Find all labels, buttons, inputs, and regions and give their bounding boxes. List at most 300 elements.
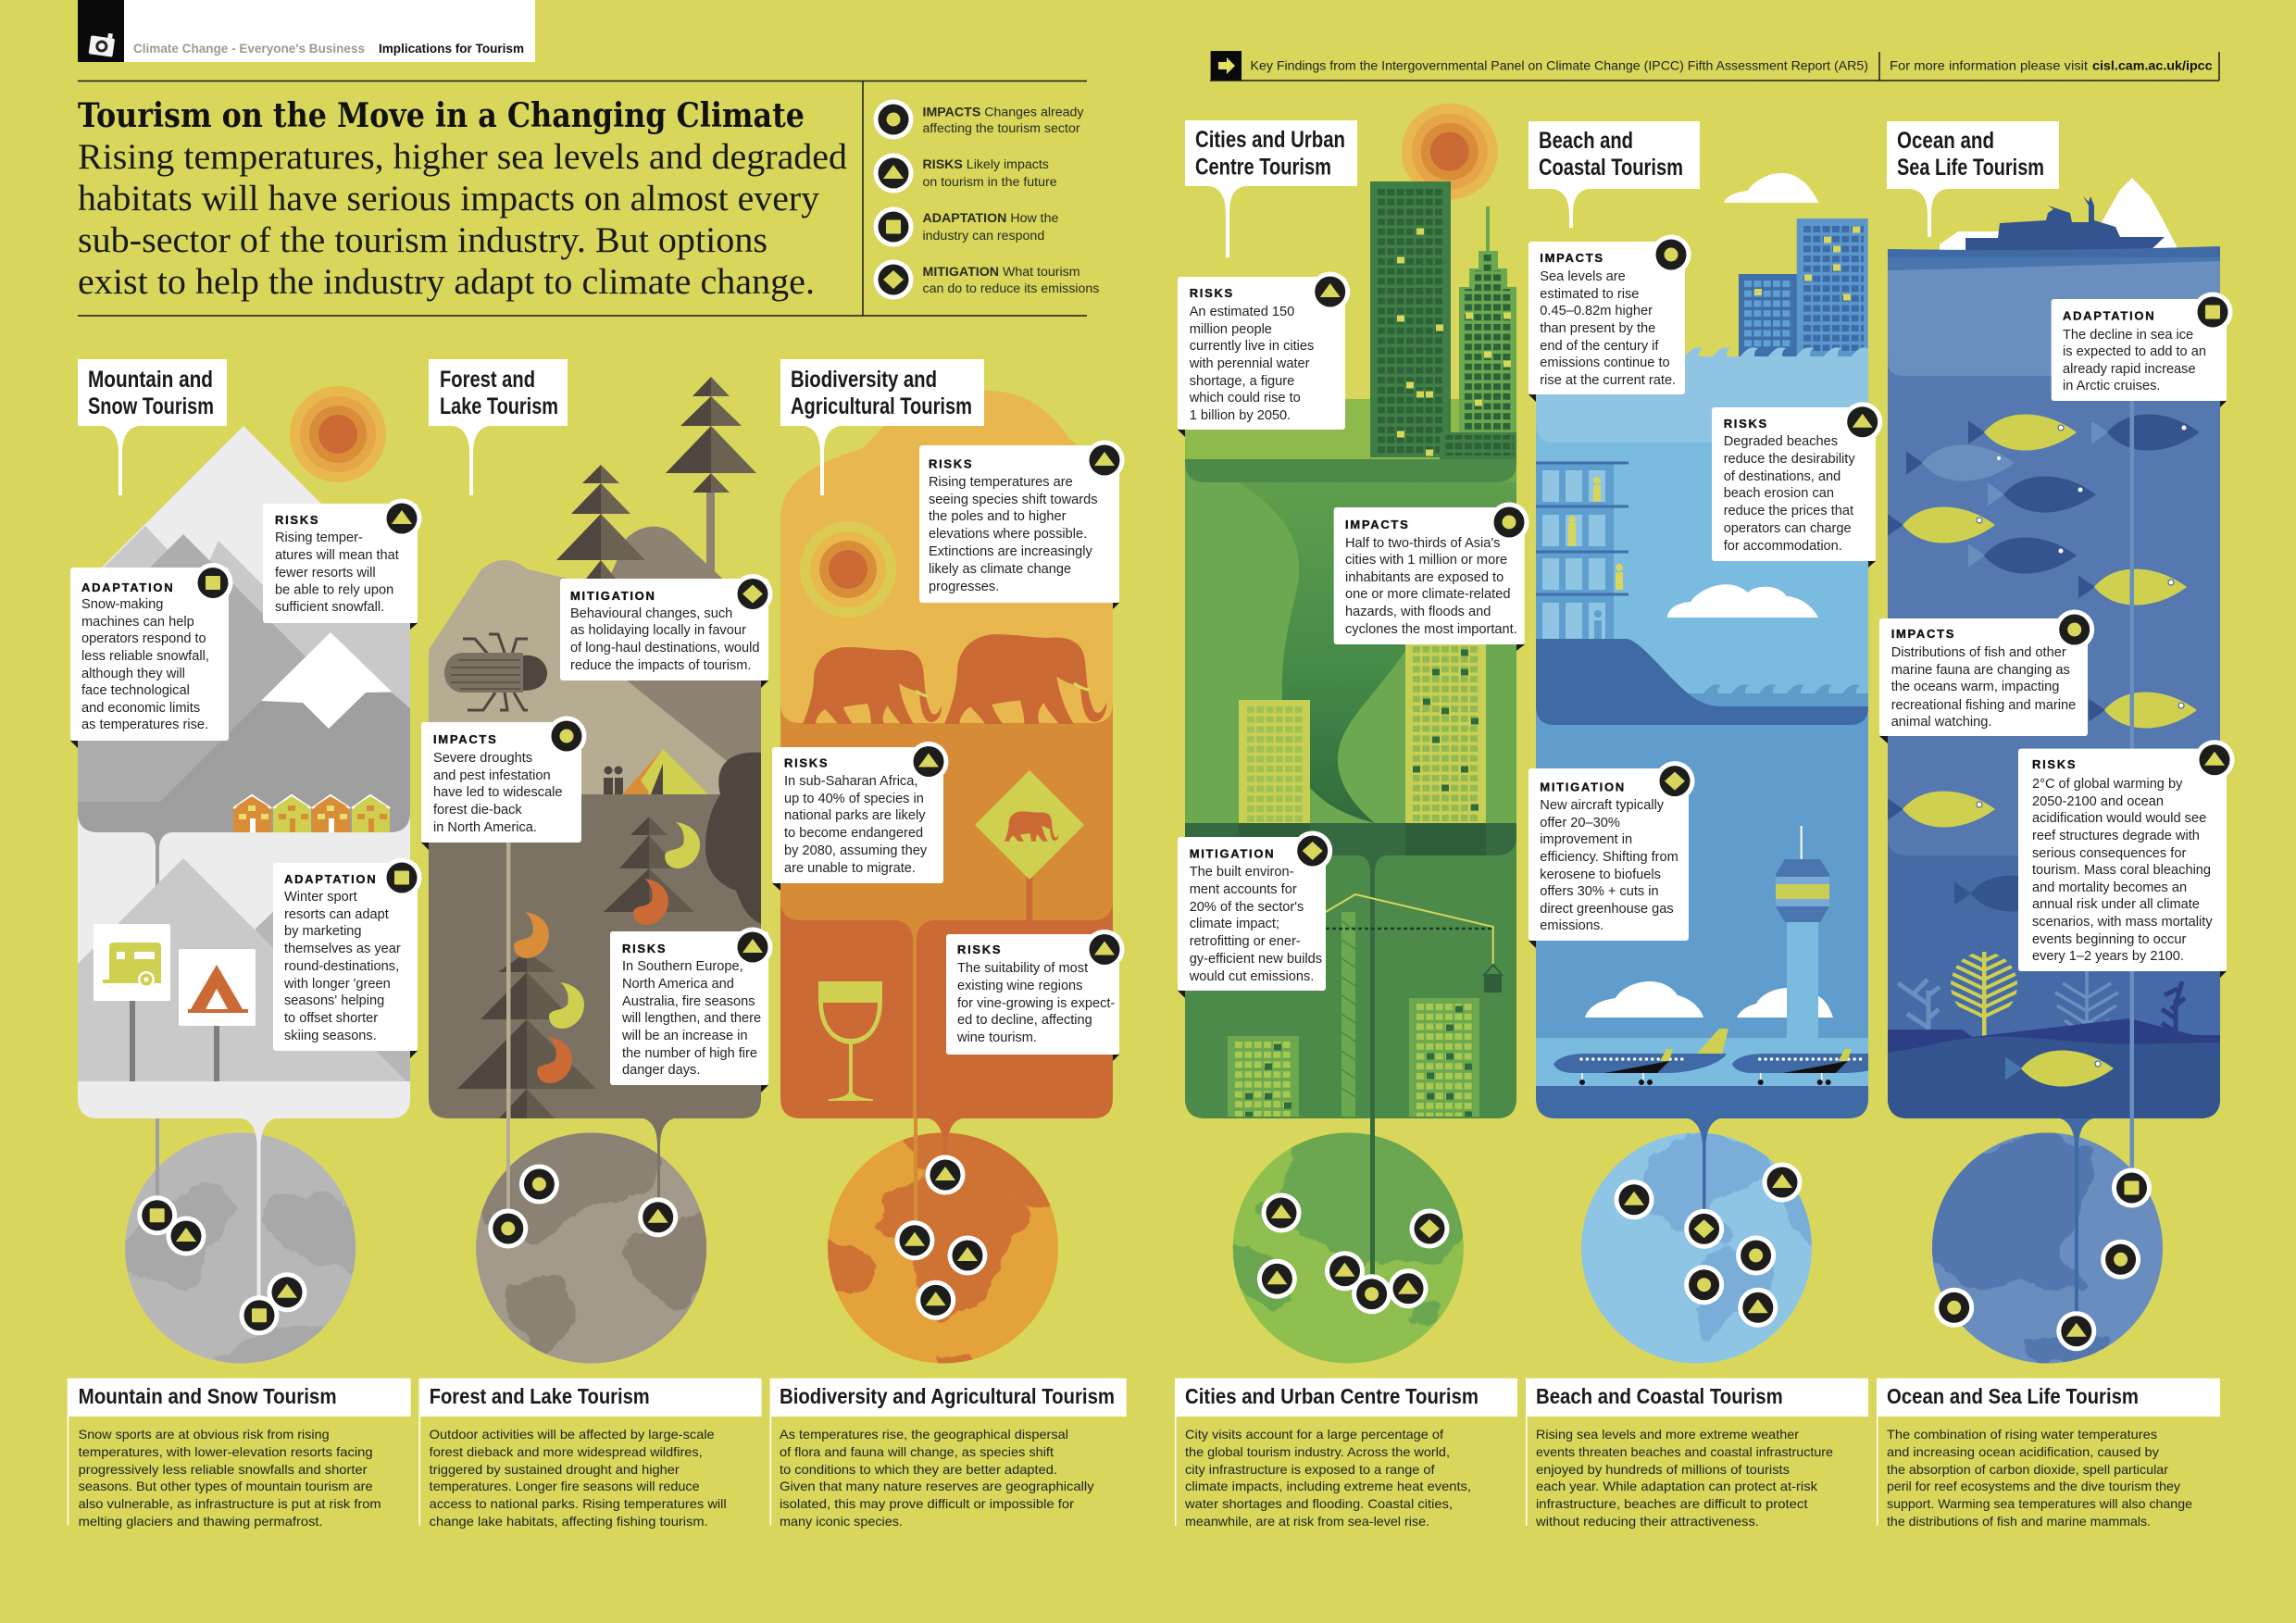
callout: mountain adaptation, green seasons: resorts can adapt: [284, 907, 389, 922]
callout: ocean risks: acidification would would see: [2032, 811, 2206, 826]
key findings header: [1210, 51, 2219, 81]
callout: cities mitigation: climate impact;: [1190, 917, 1279, 931]
summary: Cities and Urban Centre Tourism: City visits account for a large percentage of: [1185, 1427, 1443, 1442]
column title: Beach and Coastal Tourism: Coastal Tourism: [1539, 155, 1683, 181]
clouds: airport: [1585, 981, 1833, 1017]
column title: Ocean and Sea Life Tourism: Sea Life Tourism: [1897, 155, 2044, 181]
callout: ocean risks: [2018, 740, 2235, 978]
callout: mountain risks: fewer resorts will: [275, 566, 376, 581]
callout: cities risks: which could rise to: [1189, 391, 1301, 406]
callout: forest impacts: in North America.: [433, 820, 537, 835]
key findings header: cisl.cam.ac.uk/ipcc: [2092, 58, 2213, 73]
key findings header: For more information please visit: [1890, 58, 2088, 73]
stems to globes: [156, 1118, 2134, 1329]
summary: Beach and Coastal Tourism: infrastructure, beaches are difficult to protect: [1536, 1496, 1808, 1511]
ground lower: [1185, 823, 1516, 1118]
tree: upper left: [556, 465, 645, 583]
sign: elephant crossing: [977, 772, 1082, 920]
callout: beach risks: reduce the prices that: [1724, 504, 1853, 518]
summary: Ocean and Sea Life Tourism: the distributions of fish and marine mammals.: [1887, 1514, 2151, 1529]
callout: forest impacts: [421, 717, 587, 850]
legend: affecting the tourism sector: [922, 121, 1080, 136]
tower: tall: [1370, 181, 1516, 459]
callout: biodiversity risks, Africa: up to 40% of species in: [784, 792, 924, 806]
callout: beach mitigation: efficiency. Shifting from: [1540, 850, 1678, 865]
callout: ocean adaptation: ADAPTATION: [2063, 309, 2155, 323]
legend: [874, 100, 1099, 300]
callout: biodiversity risks, species shift: elevations where possible.: [929, 527, 1087, 542]
callout: biodiversity risks, wine: for vine-growing is expect-: [957, 996, 1115, 1011]
callout: mountain risks: atures will mean that: [275, 548, 399, 563]
summary: Cities and Urban Centre Tourism: city infrastructure is exposed to a range of: [1185, 1462, 1435, 1477]
summary: Ocean and Sea Life Tourism: support. Warming sea temperatures will also change: [1887, 1496, 2192, 1511]
seabed: [1888, 1018, 2220, 1118]
callout: beach impacts: estimated to rise: [1540, 287, 1639, 302]
callout: forest impacts: Severe droughts: [433, 751, 532, 766]
callout: cities impacts: IMPACTS: [1345, 518, 1409, 531]
callout: mountain adaptation, snow-making: [70, 563, 233, 748]
callout: biodiversity risks, species shift: Extinctions are increasingly: [929, 544, 1093, 559]
column title: Mountain and Snow Tourism: [78, 359, 227, 495]
callout: mountain adaptation, green seasons: Winter sport: [284, 890, 357, 905]
summary: Cities and Urban Centre Tourism: the global tourism industry. Across the world,: [1185, 1444, 1450, 1459]
column title: Mountain and Snow Tourism: Mountain and: [88, 367, 213, 393]
towers: seafront: [1739, 218, 1868, 356]
fish: bottom: [2005, 1050, 2114, 1087]
building: lower right: [1409, 998, 1479, 1117]
intro text: habitats will have serious impacts on almost every: [78, 179, 819, 218]
summary: Mountain and Snow Tourism: Mountain and Snow Tourism: [79, 1384, 337, 1408]
callout: ocean adaptation: [2052, 293, 2233, 407]
column title: Forest and Lake Tourism: [429, 359, 568, 495]
callout: ocean risks: tourism. Mass coral bleaching: [2032, 863, 2211, 878]
key findings header: Key Findings from the Intergovernmental Panel on Climate Change (IPCC) Fifth Assessment Report (AR5): [1250, 58, 1868, 73]
fish shoal: [1887, 414, 2200, 912]
callout: mountain adaptation, green seasons: [273, 857, 422, 1058]
callout: cities mitigation: 20% of the sector's: [1190, 900, 1304, 915]
icon: camera: [89, 31, 116, 57]
callout: cities impacts: cities with 1 million or more: [1345, 553, 1507, 568]
summary: Forest and Lake Tourism: [418, 1379, 761, 1529]
callout: cities mitigation: retrofitting or ener-: [1190, 934, 1301, 949]
callout: forest mitigation: MITIGATION: [570, 589, 656, 603]
legend: IMPACTS Changes already: [922, 106, 1084, 120]
callout: forest risks: the number of high fire: [622, 1046, 757, 1061]
callout: forest risks: will be an increase in: [621, 1029, 747, 1043]
globe: forest: [476, 1133, 707, 1363]
callout: cities mitigation: The built environ-: [1190, 865, 1294, 880]
callout: biodiversity risks, species shift: [919, 441, 1124, 609]
coral: left branch: [1898, 980, 1940, 1046]
callout: forest risks: North America and: [622, 977, 734, 992]
callout: beach impacts: than present by the: [1540, 321, 1655, 336]
column title: Mountain and Snow Tourism: Snow Tourism: [88, 393, 214, 419]
elephants: [803, 634, 1106, 724]
summary: Mountain and Snow Tourism: seasons. But other types of mountain tourism are: [79, 1479, 373, 1493]
callout: biodiversity risks, Africa: national parks are likely: [784, 808, 926, 823]
callout: mountain adaptation, snow-making: machines can help: [81, 615, 194, 630]
callout: mountain adaptation, green seasons: skiing seasons.: [284, 1029, 377, 1043]
callout: forest impacts: IMPACTS: [433, 732, 497, 746]
callout: mountain adaptation, green seasons: to offset shorter: [284, 1011, 378, 1026]
intro text: Rising temperatures, higher sea levels and degraded: [78, 137, 848, 177]
summary: Forest and Lake Tourism: triggered by sustained drought and higher: [430, 1462, 680, 1477]
callout: biodiversity risks, species shift: Rising temperatures are: [929, 475, 1073, 490]
ship: [1965, 196, 2165, 253]
callout: mountain risks: be able to rely upon: [275, 583, 393, 598]
sun: [800, 521, 896, 618]
callout: mountain adaptation, green seasons: with longer 'green: [283, 977, 391, 992]
callout: mountain risks: [263, 498, 422, 630]
callout: biodiversity risks, Africa: are unable to migrate.: [784, 861, 916, 876]
globe markers: [137, 1155, 2152, 1351]
callout: beach mitigation: offer 20–30%: [1540, 816, 1620, 830]
sun: [1402, 104, 1498, 200]
summary: Biodiversity and Agricultural Tourism: of flora and fauna will change, as species shift: [780, 1444, 1054, 1459]
globe: beach: [1581, 1130, 1824, 1363]
callout: biodiversity risks, species shift: the poles and to higher: [929, 509, 1067, 524]
callout: forest impacts: have led to widescale: [433, 785, 563, 800]
callout: biodiversity risks, wine: [946, 930, 1124, 1061]
column title: Biodiversity and Agricultural Tourism: Agricultural Tourism: [791, 393, 972, 419]
callout: ocean impacts: marine fauna are changing as: [1891, 663, 2070, 678]
callout: ocean risks: annual risk under all climate: [2032, 897, 2200, 912]
header tab: [78, 0, 535, 62]
callout: ocean risks: every 1–2 years by 2100.: [2032, 949, 2184, 964]
summary: Cities and Urban Centre Tourism: climate impacts, including extreme heat events,: [1185, 1479, 1471, 1493]
iceberg: [1940, 178, 2178, 250]
callout: ocean impacts: recreational fishing and marine: [1891, 698, 2076, 713]
callout: mountain risks: sufficient snowfall.: [275, 600, 384, 615]
callout: mountain risks: RISKS: [275, 513, 319, 527]
callout: ocean adaptation: in Arctic cruises.: [2063, 379, 2160, 393]
legend: can do to reduce its emissions: [922, 281, 1099, 296]
callout: beach risks: for accommodation.: [1724, 539, 1842, 554]
callout: forest mitigation: reduce the impacts of tourism.: [570, 658, 751, 673]
summary: Forest and Lake Tourism: change lake habitats, affecting fishing tourism.: [430, 1514, 708, 1529]
intro text: exist to help the industry adapt to climate change.: [78, 262, 815, 302]
callout: beach impacts: 0.45–0.82m higher: [1540, 304, 1653, 318]
callout: biodiversity risks, Africa: to become endangered: [784, 826, 923, 841]
waves: top: [1685, 347, 1868, 356]
summary: Biodiversity and Agricultural Tourism: [770, 1379, 1127, 1529]
connector stem: [144, 832, 171, 889]
summary: Beach and Coastal Tourism: each year. While adaptation can protect at-risk: [1536, 1479, 1818, 1493]
bush: [705, 753, 761, 924]
callout: ocean risks: RISKS: [2032, 757, 2077, 771]
callout: cities risks: 1 billion by 2050.: [1190, 408, 1291, 423]
column title: Biodiversity and Agricultural Tourism: [780, 359, 984, 495]
callout: mountain adaptation, snow-making: and economic limits: [81, 701, 200, 716]
callout: beach mitigation: New aircraft typically: [1540, 798, 1665, 813]
coral: yellow fan: [1951, 952, 2017, 1036]
tower: stepped skyscraper: [1459, 206, 1516, 432]
globe: mountain: [120, 1133, 366, 1370]
sign: tent: [179, 949, 256, 1081]
callout: biodiversity risks, species shift: likely as climate change: [929, 562, 1071, 577]
plane 2: [1731, 1049, 1868, 1085]
callout: ocean risks: reef structures degrade with: [2032, 829, 2200, 843]
callout: forest mitigation: as holidaying locally in favour: [570, 623, 746, 638]
callout: mountain adaptation, snow-making: as temperatures rise.: [81, 718, 208, 732]
column title: Ocean and Sea Life Tourism: [1887, 121, 2059, 237]
callout: biodiversity risks, species shift: seeing species shift towards: [929, 493, 1098, 507]
callout: forest impacts: and pest infestation: [433, 768, 551, 783]
summary: Cities and Urban Centre Tourism: Cities and Urban Centre Tourism: [1185, 1384, 1479, 1408]
column title: Beach and Coastal Tourism: Beach and: [1539, 128, 1633, 154]
callout: ocean adaptation: is expected to add to an: [2063, 344, 2206, 359]
summary: Ocean and Sea Life Tourism: the absorption of carbon dioxide, spell particular: [1887, 1462, 2168, 1477]
panel: beach and coastal: [1536, 173, 1905, 1118]
summary: Beach and Coastal Tourism: events threaten beaches and coastal infrastructure: [1536, 1444, 1833, 1459]
callout: beach risks: operators can charge: [1724, 521, 1852, 536]
column title: Forest and Lake Tourism: Forest and: [440, 367, 535, 393]
callout: cities mitigation: gy-efficient new builds: [1190, 952, 1322, 967]
callout: ocean risks: and mortality becomes an: [2032, 880, 2187, 895]
callout: forest mitigation: [560, 574, 772, 688]
callout: ocean adaptation: already rapid increase: [2063, 362, 2196, 377]
callout: cities impacts: [1334, 502, 1529, 651]
stem: [1359, 855, 1386, 1118]
summary: Cities and Urban Centre Tourism: [1175, 1379, 1517, 1529]
summary: Biodiversity and Agricultural Tourism: isolated, this may prove difficult or impossible for: [780, 1496, 1074, 1511]
callout: biodiversity risks, Africa: In sub-Saharan Africa,: [784, 774, 917, 789]
column title: Biodiversity and Agricultural Tourism: Biodiversity and: [791, 367, 937, 393]
summary: Mountain and Snow Tourism: also vulnerable, as infrastructure is put at risk from: [79, 1496, 381, 1511]
callout: cities risks: shortage, a figure: [1190, 374, 1294, 389]
snow cap: [261, 632, 392, 729]
summary: Biodiversity and Agricultural Tourism: As temperatures rise, the geographical dispersal: [780, 1427, 1068, 1442]
building: mid right: [1405, 644, 1486, 823]
summary: Cities and Urban Centre Tourism: water shortages and flooding. Coastal cities,: [1184, 1496, 1453, 1511]
cloud: middle: [1667, 584, 1818, 618]
header tab: Implications for Tourism: [379, 42, 524, 56]
callout: beach risks: Degraded beaches: [1724, 434, 1838, 449]
callout: beach impacts: [1529, 235, 1691, 402]
callout: mountain adaptation, snow-making: less reliable snowfall,: [81, 649, 209, 664]
callout: cities mitigation: MITIGATION: [1190, 846, 1275, 860]
callout: beach impacts: IMPACTS: [1540, 251, 1604, 265]
cloud: top: [1724, 173, 1819, 203]
column title: Beach and Coastal Tourism: [1529, 121, 1700, 228]
callout: forest risks: Australia, fire seasons: [622, 994, 755, 1009]
callout: ocean impacts: Distributions of fish and other: [1891, 645, 2066, 660]
callout: ocean impacts: IMPACTS: [1891, 627, 1955, 641]
legend: industry can respond: [922, 229, 1044, 243]
callout: beach mitigation: direct greenhouse gas: [1540, 902, 1674, 917]
callout: beach risks: of destinations, and: [1724, 469, 1841, 484]
column title: Cities and Urban Centre Tourism: [1185, 120, 1357, 257]
summary: Ocean and Sea Life Tourism: peril for reef ecosystems and the dive tourism they: [1887, 1479, 2180, 1493]
callout: mountain adaptation, green seasons: ADAPTATION: [284, 872, 377, 886]
globe: ocean: [1921, 1130, 2163, 1363]
swoosh: [1238, 482, 1516, 823]
callout: mountain adaptation, green seasons: by marketing: [284, 924, 362, 939]
callout: cities impacts: hazards, with floods and: [1345, 605, 1491, 619]
summary: Beach and Coastal Tourism: enjoyed by hundreds of millions of tourists: [1536, 1462, 1790, 1477]
summary: Mountain and Snow Tourism: melting glaciers and thawing permafrost.: [79, 1514, 323, 1529]
summary: Mountain and Snow Tourism: Snow sports are at obvious risk from rising: [79, 1427, 330, 1442]
hotel: [1536, 463, 1628, 648]
callout: cities impacts: inhabitants are exposed to: [1345, 570, 1504, 585]
callout: biodiversity risks, wine: wine tourism.: [956, 1030, 1037, 1045]
panel: mountain and snow: [78, 386, 410, 1118]
summary: Beach and Coastal Tourism: Rising sea levels and more extreme weather: [1536, 1427, 1799, 1442]
coral: dark branch: [2162, 981, 2185, 1046]
callout: biodiversity risks, Africa: by 2080, assuming they: [784, 843, 928, 858]
summary: Forest and Lake Tourism: Forest and Lake Tourism: [430, 1384, 650, 1408]
column title: Cities and Urban Centre Tourism: Centre Tourism: [1195, 154, 1331, 180]
callout: cities risks: with perennial water: [1189, 356, 1310, 371]
callout: ocean risks: 2°C of global warming by: [2032, 777, 2183, 792]
callout: beach risks: reduce the desirability: [1724, 452, 1855, 467]
callout: biodiversity risks, species shift: RISKS: [929, 457, 973, 470]
intro text: sub-sector of the tourism industry. But options: [78, 220, 767, 260]
callout: ocean risks: 2050-2100 and ocean: [2032, 794, 2164, 809]
callout: cities risks: An estimated 150: [1190, 305, 1294, 319]
trees with flames: [457, 817, 700, 1118]
summary: Mountain and Snow Tourism: progressively less reliable snowfalls and shorter: [79, 1462, 368, 1477]
coral: pale feather: [2055, 971, 2118, 1046]
callout: cities risks: currently live in cities: [1190, 339, 1314, 354]
building: lower left: [1228, 1036, 1299, 1117]
panel: ocean and sea life: [1887, 178, 2220, 1118]
sign: caravan: [94, 924, 170, 1081]
callout: beach impacts: emissions continue to: [1540, 356, 1670, 370]
callout: forest mitigation: Behavioural changes, such: [570, 606, 732, 621]
planes: [1554, 1029, 1868, 1085]
callout: ocean impacts: animal watching.: [1891, 715, 1991, 730]
plane 1: [1554, 1029, 1728, 1085]
summary: Cities and Urban Centre Tourism: meanwhile, are at risk from sea-level rise.: [1185, 1514, 1429, 1529]
summary: Biodiversity and Agricultural Tourism: Given that many nature reserves are geographically: [780, 1479, 1094, 1493]
callout: ocean risks: scenarios, with mass mortality: [2032, 915, 2213, 930]
legend: ADAPTATION How the: [922, 211, 1059, 226]
callout: beach mitigation: improvement in: [1540, 832, 1632, 847]
summary: Ocean and Sea Life Tourism: The combination of rising water temperatures: [1887, 1427, 2157, 1442]
title: Tourism on the Move in a Changing Climate: [78, 96, 805, 135]
crane: [1326, 894, 1502, 1117]
callout: mountain adaptation, snow-making: ADAPTATION: [81, 581, 174, 594]
callout: beach risks: beach erosion can: [1724, 486, 1834, 501]
panel: forest and lake: [429, 377, 761, 1118]
callout: mountain adaptation, green seasons: round-destinations,: [284, 959, 399, 974]
legend: MITIGATION What tourism: [922, 265, 1080, 280]
callout: biodiversity risks, wine: RISKS: [957, 943, 1002, 956]
callout: biodiversity risks, wine: The suitability of most: [957, 961, 1088, 976]
callout: beach impacts: Sea levels are: [1540, 269, 1626, 284]
callout: ocean adaptation: The decline in sea ice: [2063, 328, 2193, 343]
callout: biodiversity risks, Africa: RISKS: [784, 756, 829, 770]
panel: biodiversity and agriculture: [780, 391, 1113, 1118]
callout: cities mitigation: [1178, 831, 1332, 998]
callout: biodiversity risks, wine: ed to decline, affecting: [957, 1013, 1092, 1028]
callout: beach mitigation: kerosene to biofuels: [1540, 868, 1661, 882]
column title: Ocean and Sea Life Tourism: Ocean and: [1897, 128, 1994, 154]
callout: cities impacts: one or more climate-related: [1345, 587, 1510, 602]
callout: ocean risks: serious consequences for: [2032, 846, 2186, 861]
callout: forest risks: [610, 928, 772, 1092]
callout: beach impacts: end of the century if: [1540, 339, 1659, 354]
callout: forest risks: RISKS: [622, 942, 667, 955]
callout: cities risks: million people: [1190, 322, 1272, 337]
summary: Beach and Coastal Tourism: Beach and Coastal Tourism: [1536, 1384, 1783, 1408]
sun: [290, 386, 386, 482]
callout: mountain risks: Rising temper-: [275, 531, 363, 545]
callout: cities risks: RISKS: [1190, 286, 1234, 300]
legend: on tourism in the future: [922, 175, 1057, 190]
sea: [1685, 693, 1868, 713]
callout: beach impacts: rise at the current rate.: [1540, 373, 1676, 388]
callout: mountain adaptation, snow-making: although they will: [81, 667, 185, 681]
summary: Beach and Coastal Tourism: without reducing their attractiveness.: [1535, 1514, 1759, 1529]
column title: Cities and Urban Centre Tourism: Cities and Urban: [1195, 127, 1345, 153]
icon: arrow: [1218, 57, 1235, 74]
callout: mountain adaptation, snow-making: operators respond to: [81, 631, 206, 646]
summary: Mountain and Snow Tourism: temperatures, with lower-elevation resorts facing: [79, 1444, 373, 1459]
callout: beach mitigation: MITIGATION: [1540, 780, 1626, 793]
summary: Beach and Coastal Tourism: [1526, 1379, 1868, 1529]
header rules: [78, 81, 1087, 316]
panel: cities and urban centre: [1185, 104, 1516, 1118]
callout: beach risks: [1712, 402, 1882, 568]
summary: Biodiversity and Agricultural Tourism: many iconic species.: [780, 1514, 903, 1529]
globe: cities: [1233, 1133, 1464, 1363]
callout: ocean risks: events beginning to occur: [2032, 932, 2186, 947]
callout: ocean impacts: [1879, 609, 2094, 743]
summary: Mountain and Snow Tourism: [68, 1379, 411, 1529]
tent and people: [604, 749, 708, 794]
callout: beach mitigation: offers 30% + cuts in: [1540, 884, 1659, 899]
hill: [1536, 639, 1868, 725]
summary: Biodiversity and Agricultural Tourism: Biodiversity and Agricultural Tourism: [780, 1384, 1115, 1408]
callout: forest risks: In Southern Europe,: [622, 959, 743, 974]
summary: Ocean and Sea Life Tourism: Ocean and Sea Life Tourism: [1887, 1384, 2139, 1408]
control tower: [1776, 826, 1829, 1086]
column title: Forest and Lake Tourism: Lake Tourism: [440, 393, 558, 419]
callout: cities mitigation: would cut emissions.: [1189, 969, 1314, 984]
callout: forest risks: will lengthen, and there: [621, 1011, 761, 1026]
stem: band connector: [896, 920, 933, 1118]
summary: Forest and Lake Tourism: forest dieback and more widespread wildfires,: [430, 1444, 703, 1459]
callout: cities impacts: cyclones the most important.: [1345, 622, 1517, 637]
callout: cities risks: [1178, 272, 1350, 437]
callout: mountain adaptation, green seasons: themselves as year: [284, 942, 401, 956]
callout: forest mitigation: of long-haul destinations, would: [570, 641, 759, 655]
callout: cities mitigation: ment accounts for: [1190, 882, 1297, 897]
callout: beach risks: RISKS: [1724, 417, 1768, 431]
summary: Forest and Lake Tourism: access to national parks. Rising temperatures will: [430, 1496, 727, 1511]
summary: Forest and Lake Tourism: Outdoor activities will be affected by large-scale: [430, 1427, 715, 1442]
callout: ocean impacts: the oceans warm, impacting: [1891, 680, 2059, 694]
callout: biodiversity risks, wine: existing wine regions: [957, 979, 1082, 993]
tree: tall right: [666, 377, 756, 583]
callout: beach mitigation: emissions.: [1540, 918, 1603, 933]
summary: Biodiversity and Agricultural Tourism: to conditions to which they are better adapted.: [780, 1462, 1057, 1477]
callout: mountain adaptation, green seasons: seasons' helping: [284, 993, 384, 1008]
wine glass: [818, 981, 882, 1101]
building: mid left: [1239, 700, 1310, 823]
houses: [233, 795, 390, 832]
callout: biodiversity risks, species shift: progresses.: [929, 580, 999, 594]
beetle: [444, 634, 547, 710]
globe: biodiversity: [828, 1133, 1059, 1363]
summary: Ocean and Sea Life Tourism: [1877, 1379, 2220, 1529]
summary: Ocean and Sea Life Tourism: and increasing ocean acidification, caused by: [1887, 1444, 2159, 1459]
callout: biodiversity risks, Africa: [772, 742, 948, 891]
callout: forest risks: danger days.: [622, 1063, 700, 1078]
header tab: Climate Change - Everyone's Business: [133, 42, 365, 56]
